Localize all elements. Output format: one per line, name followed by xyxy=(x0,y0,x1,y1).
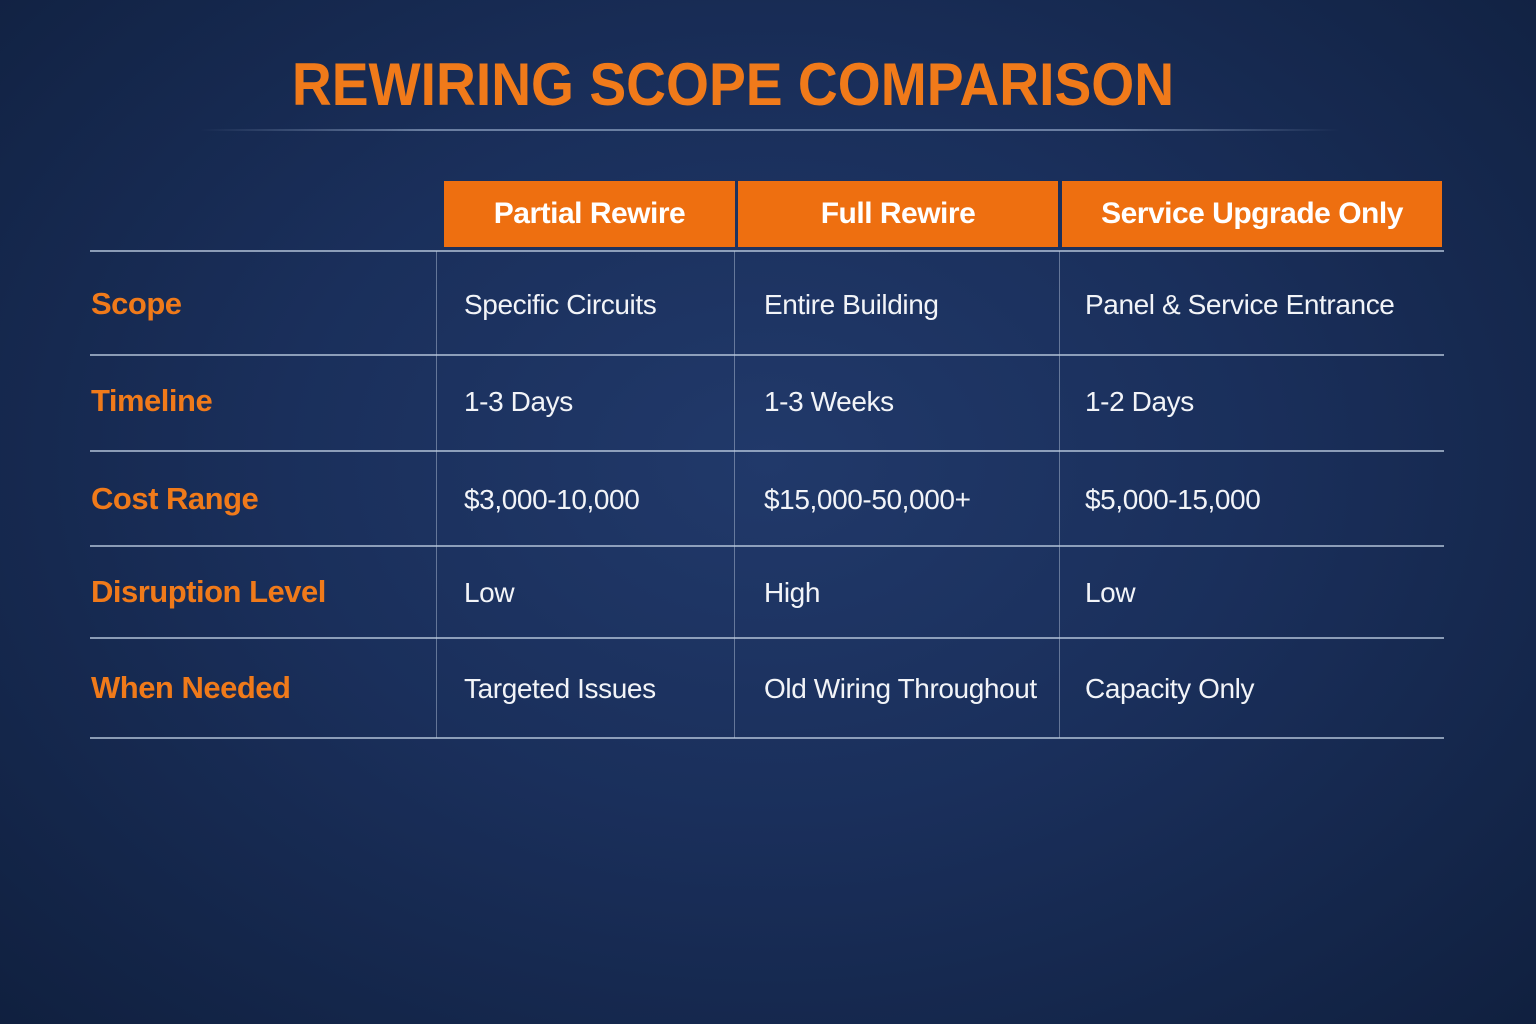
row: Timeline: Timeline xyxy=(91,383,212,418)
header: Partial Rewire: Partial Rewire xyxy=(494,197,685,230)
text: 1-2 Days xyxy=(1085,386,1194,417)
text: Low xyxy=(1085,577,1135,608)
text: $15,000-50,000+ xyxy=(764,484,971,515)
text: Entire Building xyxy=(764,289,939,320)
row: Disruption Level: Disruption Level xyxy=(91,574,326,609)
text: High xyxy=(764,577,820,608)
row: Cost Range: Cost Range xyxy=(91,481,258,516)
row: When Needed: When Needed xyxy=(91,670,290,705)
header: Service Upgrade Only xyxy=(1062,181,1442,247)
text: $5,000-15,000 xyxy=(1085,484,1260,515)
row: Scope: Scope xyxy=(91,286,182,321)
header: Partial Rewire xyxy=(444,181,735,247)
text: Old Wiring Throughout xyxy=(764,673,1037,704)
text: Targeted Issues xyxy=(464,673,656,704)
text: Capacity Only xyxy=(1085,673,1254,704)
text: 1-3 Days xyxy=(464,386,573,417)
header: Service Upgrade Only: Service Upgrade Only xyxy=(1101,197,1403,230)
header: Full Rewire xyxy=(738,181,1058,247)
text: Low xyxy=(464,577,514,608)
text: Panel & Service Entrance xyxy=(1085,289,1394,320)
text: Specific Circuits xyxy=(464,289,656,320)
title: REWIRING SCOPE COMPARISON xyxy=(292,51,1174,118)
text: 1-3 Weeks xyxy=(764,386,894,417)
text: $3,000-10,000 xyxy=(464,484,639,515)
header: Full Rewire: Full Rewire xyxy=(821,197,975,230)
table header xyxy=(444,181,1442,247)
